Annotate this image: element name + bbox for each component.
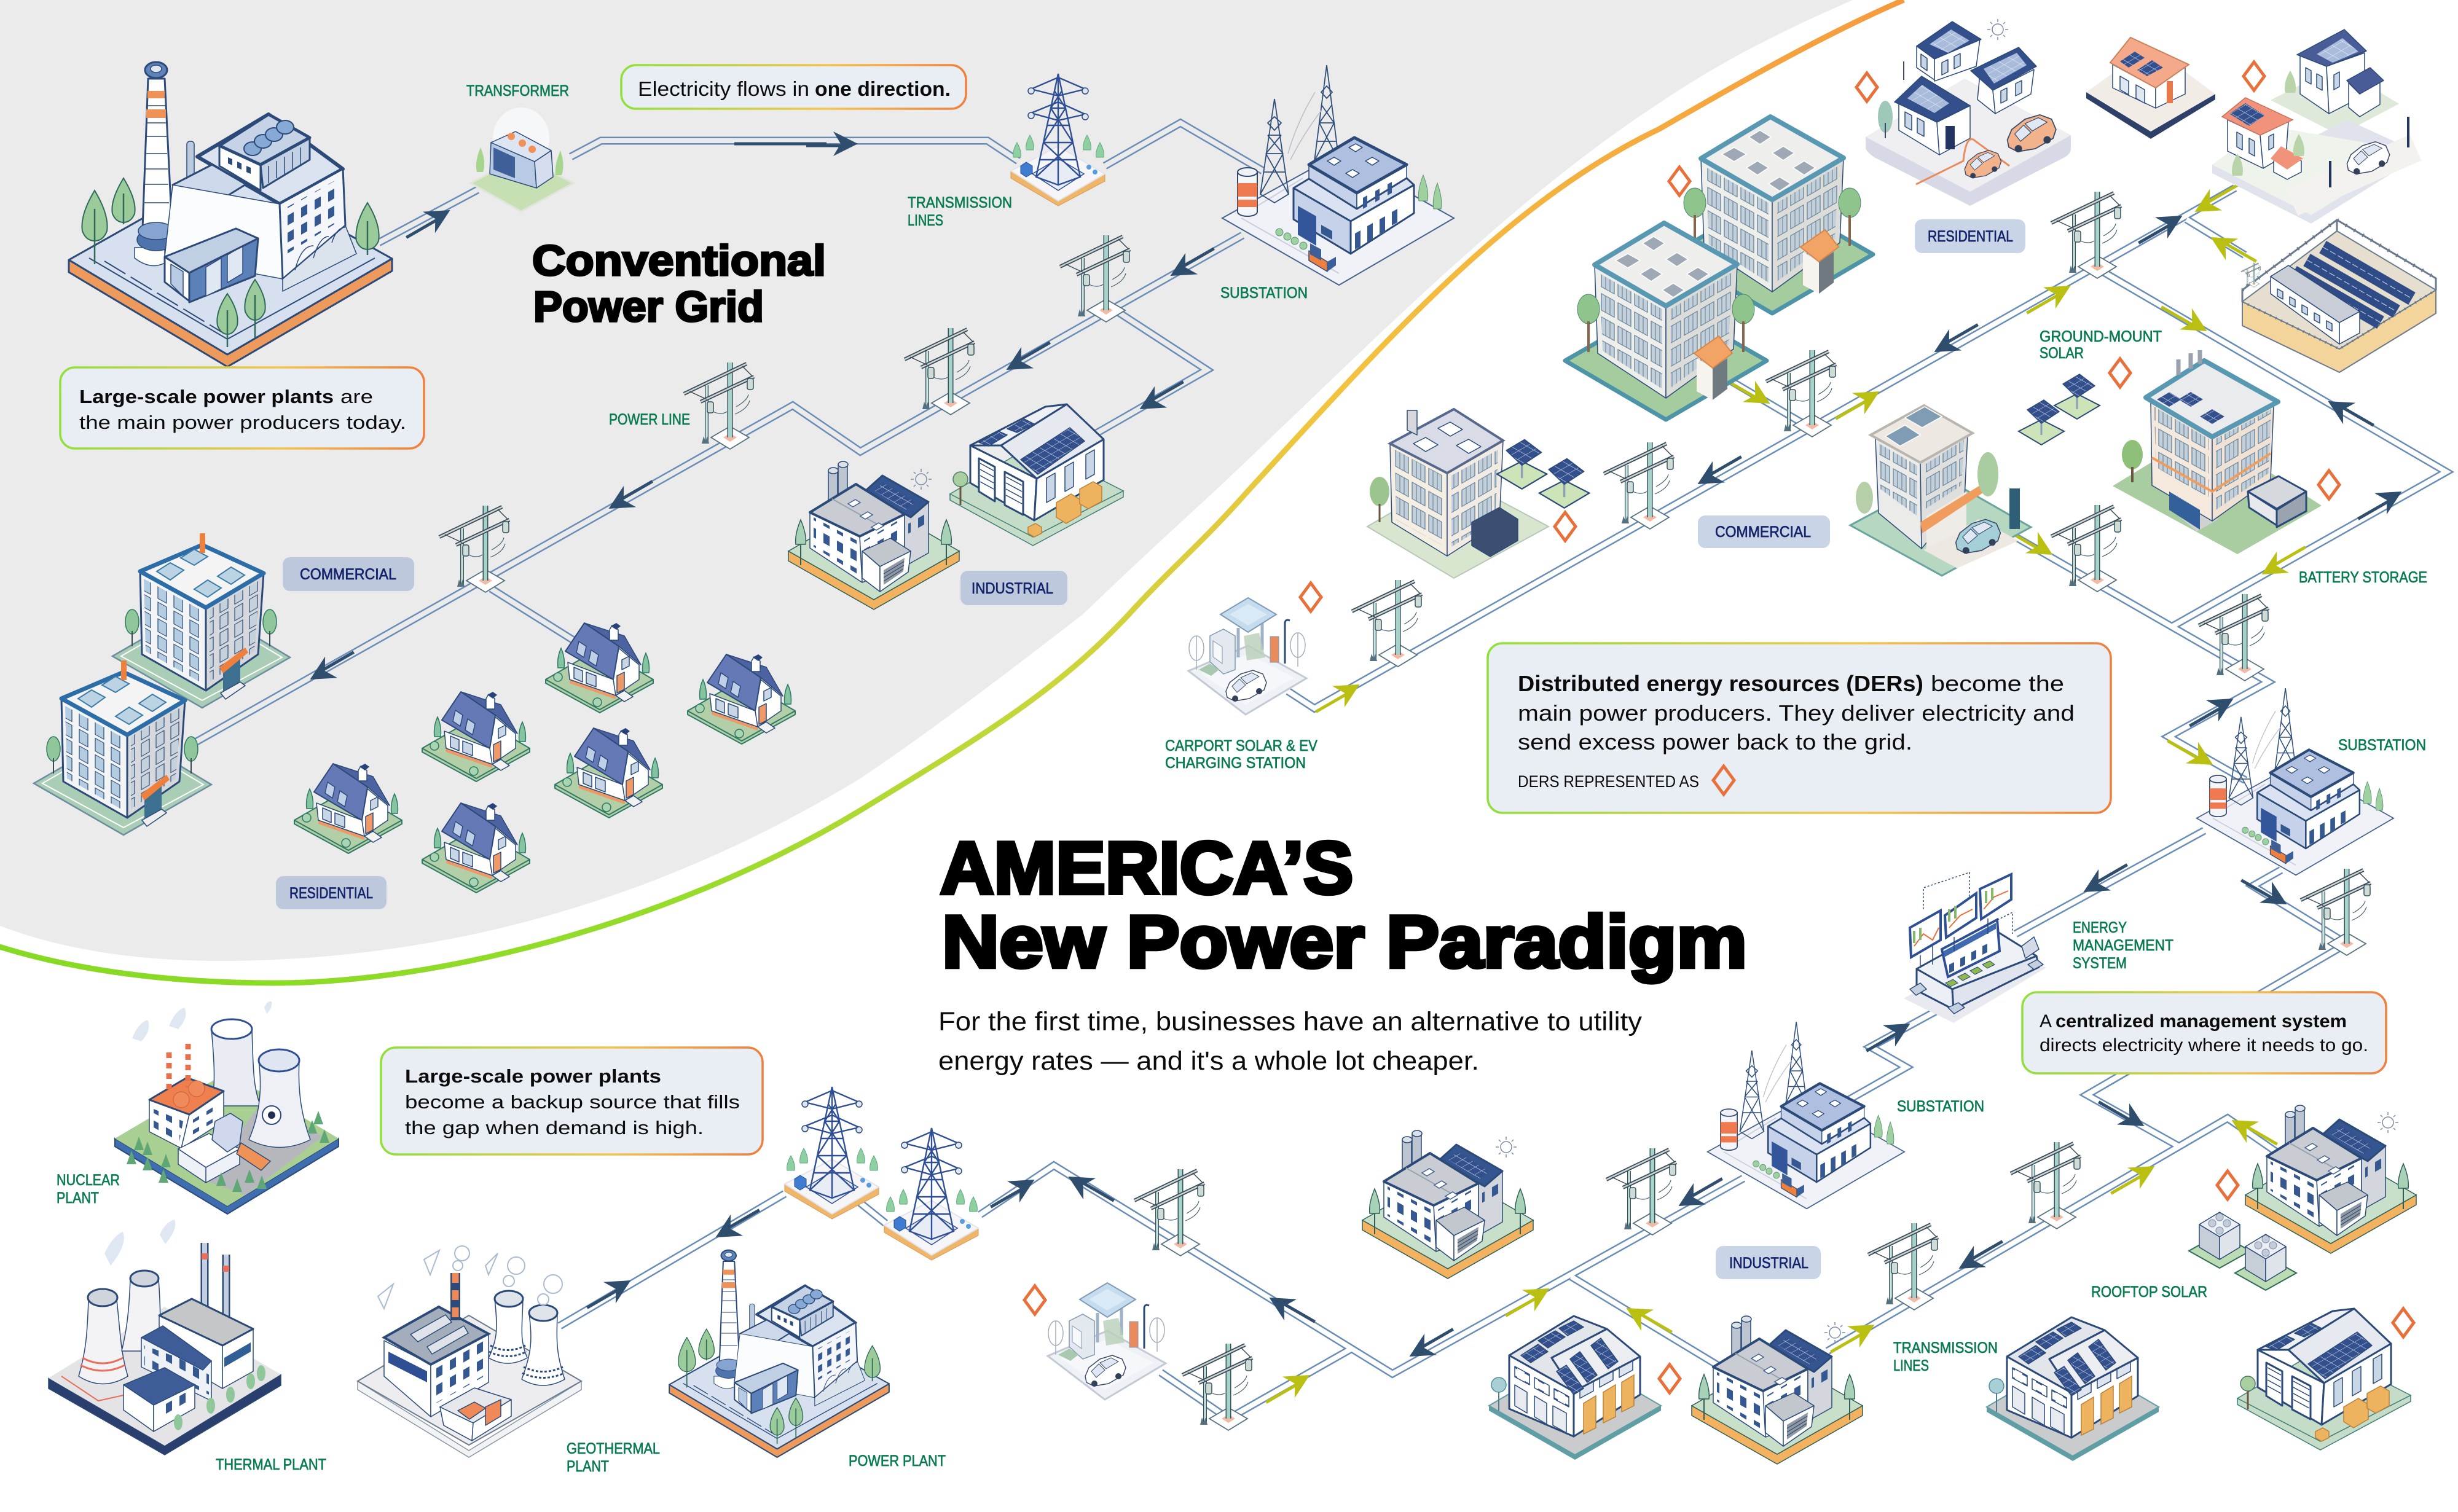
callout: one direction — [621, 65, 966, 109]
callout: backup source: become a backup source that fills — [405, 1091, 740, 1113]
labels: component names: POWER PLANT — [849, 1452, 946, 1470]
icon: energy management system — [1904, 872, 2046, 1023]
labels: component names: GROUND-MOUNT — [2040, 328, 2162, 345]
callout: centralized management: directs electricity where it needs to go. — [2040, 1035, 2368, 1056]
callout: large-scale plants today: the main power producers today. — [79, 412, 406, 433]
icon: sun — [2378, 1112, 2398, 1133]
icon: power poles, new grid — [1134, 192, 2371, 1430]
callout: distributed energy resources — [1488, 643, 2111, 813]
icon: factory, conventional — [788, 461, 959, 609]
tag: commercial, new grid: COMMERCIAL — [1715, 523, 1811, 541]
icon: residential houses, conventional — [294, 623, 795, 893]
labels: component names: PLANT — [567, 1458, 609, 1475]
subtitle: energy rates — and it's a whole lot cheaper. — [938, 1046, 1479, 1076]
labels: component names: SUBSTATION — [1897, 1098, 1984, 1115]
icon: warehouse, conventional — [950, 404, 1123, 546]
labels: component names: TRANSMISSION — [1893, 1339, 1998, 1357]
icon: thermal plant — [49, 1220, 281, 1455]
labels: component names: CHARGING STATION — [1165, 754, 1306, 772]
labels: component names: CARPORT SOLAR & EV — [1165, 737, 1317, 754]
icon: transmission towers, lower — [785, 1087, 978, 1260]
labels: component names: SUBSTATION — [1220, 284, 1308, 302]
icon: transmission tower — [1011, 74, 1105, 206]
labels: component names: BATTERY STORAGE — [2299, 569, 2427, 586]
icon: sun — [911, 469, 932, 490]
tag: industrial, new grid: INDUSTRIAL — [1729, 1255, 1808, 1272]
icon: two houses with solar — [2212, 29, 2416, 224]
order markers: DER diamonds — [1024, 62, 2414, 1393]
labels: component names: TRANSFORMER — [466, 82, 569, 100]
labels: component names: THERMAL PLANT — [216, 1456, 326, 1473]
power lines: new grid — [560, 188, 2446, 1419]
icon: substation, right — [2197, 688, 2393, 875]
icon: geothermal plant — [358, 1246, 581, 1457]
main title — [940, 827, 1747, 983]
icon: ground-mount solar plant — [2241, 220, 2436, 372]
power lines: conventional grid — [187, 123, 1263, 747]
icon: carport solar and EV charging, lower — [1048, 1283, 1166, 1400]
icon: factory with DER, bottom — [1692, 1316, 1863, 1464]
icon: power plant, conventional — [69, 62, 392, 367]
tag: commercial, conventional — [283, 557, 414, 591]
flow arrows: conventional grid — [304, 131, 1221, 690]
icon: commercial building with solar — [1367, 409, 1589, 578]
icon: substation — [1222, 65, 1454, 285]
callout: backup source: Large-scale power plants — [405, 1065, 661, 1087]
tag: residential, new grid: RESIDENTIAL — [1928, 228, 2013, 245]
labels: component names: SOLAR — [2040, 345, 2084, 362]
labels: component names: SYSTEM — [2073, 955, 2127, 972]
callout: distributed energy resources: main power producers. They deliver electricity and — [1518, 700, 2075, 726]
tag: commercial, conventional: COMMERCIAL — [300, 566, 396, 583]
icon: sun — [1496, 1137, 1517, 1158]
main title: New Power Paradigm — [942, 901, 1747, 983]
background: conventional grid region — [0, 0, 1853, 961]
tag: commercial, new grid — [1698, 515, 1830, 548]
subtitle — [938, 1007, 1643, 1076]
icon: office with battery storage — [2113, 350, 2322, 554]
labels: component names: PLANT — [57, 1189, 99, 1207]
icon: warehouse with rooftop solar, left — [1489, 1316, 1661, 1460]
callout: distributed energy resources: send excess power back to the grid. — [1518, 729, 1912, 754]
divider curve — [0, 0, 1904, 983]
heading: conventional power grid: Power Grid — [533, 283, 764, 331]
icon: house with solar, base — [2086, 37, 2215, 139]
labels: component names: ENERGY — [2073, 919, 2127, 936]
tag: residential, new grid — [1915, 219, 2025, 253]
main title: AMERICA’S — [940, 827, 1353, 909]
heading: conventional power grid: Conventional — [532, 237, 826, 284]
callout: one direction: one direction. — [815, 77, 951, 100]
callout: backup source — [381, 1048, 763, 1154]
icon: coloured offices with solar — [1565, 117, 1873, 420]
labels: component names: POWER LINE — [609, 411, 690, 428]
callout: centralized management: A — [2040, 1011, 2052, 1032]
icon: sun — [1824, 1322, 1845, 1343]
tag: industrial, conventional: INDUSTRIAL — [972, 580, 1053, 597]
tag: residential, conventional — [276, 876, 387, 909]
heading: conventional power grid — [532, 237, 826, 331]
callout: large-scale plants today: are — [340, 386, 373, 407]
icon: office with EV charger — [1850, 405, 2031, 576]
flow arrows: new grid, utility direction — [580, 205, 2408, 1367]
tag: industrial, new grid — [1716, 1246, 1821, 1279]
icon: factory with DER, right — [2245, 1105, 2416, 1253]
icon: transformer — [471, 108, 573, 211]
callout: centralized management: centralized management system — [2056, 1011, 2347, 1032]
tag: residential, conventional: RESIDENTIAL — [289, 885, 373, 902]
labels: component names: NUCLEAR — [57, 1172, 120, 1189]
subtitle: For the first time, businesses have an alternative to utility — [938, 1007, 1643, 1036]
labels: component names: ROOFTOP SOLAR — [2091, 1283, 2207, 1301]
icon: ground-mount solar panels — [2019, 374, 2100, 445]
labels: component names: MANAGEMENT — [2073, 937, 2173, 954]
flow arrows: new grid, DER direction — [1259, 176, 2312, 1411]
icon: carport solar and EV charging, upper — [1188, 598, 1306, 715]
callout: backup source: the gap when demand is high. — [405, 1117, 704, 1138]
icon: warehouse with rooftop solar, right — [2237, 1309, 2411, 1450]
callout: distributed energy resources: DERS REPRESENTED AS — [1518, 772, 1699, 791]
labels: component names: LINES — [1893, 1357, 1929, 1374]
icon: factory, lower centre — [1362, 1130, 1533, 1279]
labels: component names: GEOTHERMAL — [567, 1440, 660, 1457]
callout: large-scale plants today — [60, 367, 424, 449]
icon: power poles, conventional — [439, 235, 1130, 592]
labels: component names: SUBSTATION — [2338, 737, 2426, 754]
callout: one direction: Electricity flows in — [638, 77, 809, 100]
icon: power plant, bottom — [669, 1250, 889, 1457]
icon: battery units — [2189, 1212, 2296, 1290]
icon: commercial offices, conventional — [34, 533, 290, 835]
tag: industrial, conventional — [960, 571, 1067, 605]
callout: distributed energy resources: become the — [1931, 671, 2064, 696]
callout: distributed energy resources: Distributed energy resources (DERs) — [1518, 671, 1923, 696]
icon: warehouse with rooftop solar, centre — [1987, 1317, 2159, 1461]
labels: component names: TRANSMISSION — [908, 194, 1012, 211]
icon: residential cluster with solar — [1866, 19, 2071, 206]
icon: substation, lower — [1708, 1022, 1904, 1208]
callout: centralized management — [2022, 992, 2386, 1073]
callout: large-scale plants today: Large-scale power plants — [79, 386, 334, 407]
labels: component names: LINES — [908, 212, 943, 229]
icon: nuclear plant — [115, 1001, 339, 1214]
